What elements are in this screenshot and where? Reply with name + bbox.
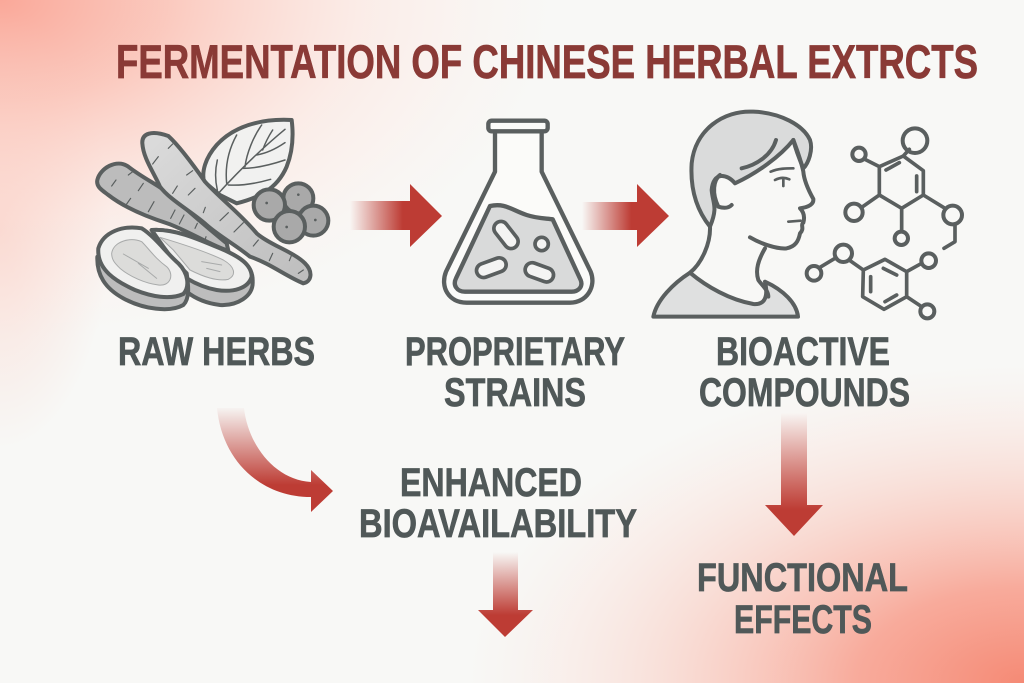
lower molecule [807,245,936,318]
face and neck lines [690,140,813,297]
icon: raw herbs [97,120,328,309]
arrow: raw herbs to strains [350,184,442,247]
flask rim [488,121,548,131]
label: bioactive compounds: COMPOUNDS [699,371,910,415]
berries [254,183,328,242]
shirt [653,273,798,317]
arrow: down from bioavailability [478,552,533,637]
upper molecule [845,128,962,248]
label: enhanced bioavailability: ENHANCED [400,461,582,505]
arrow: strains to compounds [582,184,669,247]
label: proprietary strains: STRAINS [444,371,586,415]
hair [691,112,811,227]
sliced root back [152,230,253,305]
liquid [455,205,581,292]
icon: human profile [653,112,813,317]
label: functional effects [697,556,908,642]
label: enhanced bioavailability [359,461,637,546]
label: raw herbs: RAW HERBS [118,330,315,374]
curved arrow: raw herbs to enhanced bioavailability [217,408,333,512]
leaf [203,120,293,203]
icon: molecules [807,128,962,318]
flask body [444,132,592,303]
label: functional effects: FUNCTIONAL [697,556,908,600]
arrow: down from compounds [765,413,823,536]
label: proprietary strains [405,330,625,415]
icon: flask with microbes [444,121,592,303]
label: bioactive compounds [699,330,910,415]
label: bioactive compounds: BIOACTIVE [716,330,890,374]
label: functional effects: EFFECTS [734,598,872,642]
label: enhanced bioavailability: BIOAVAILABILITY [359,502,637,546]
left root [97,164,228,251]
label: proprietary strains: PROPRIETARY [405,330,625,374]
microbes [475,219,556,284]
sliced root front [97,227,188,309]
long root [142,133,310,283]
